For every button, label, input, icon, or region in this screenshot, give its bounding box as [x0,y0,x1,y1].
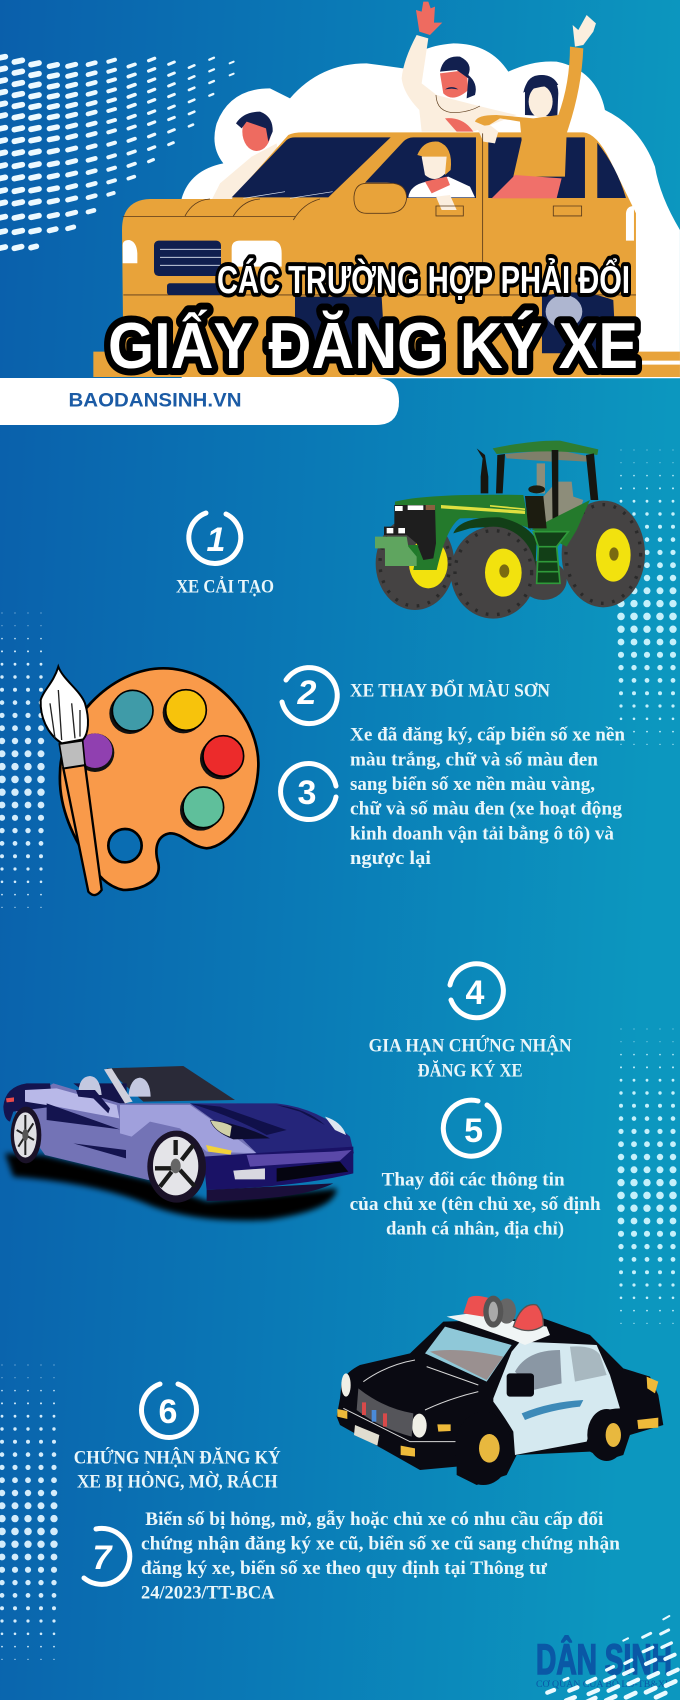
dot pattern: right lower [621,1029,674,1323]
item 6 label: CHỨNG NHẬN ĐĂNG KÝ [74,1446,281,1468]
salmon hand [445,118,473,132]
driver [408,141,475,210]
item 3 text [350,726,626,869]
icon: police car [337,1296,663,1485]
item 6 number: 6 [159,1393,177,1431]
item 5 text: danh cá nhân, địa chỉ) [386,1219,564,1239]
icon: blue convertible [3,1066,354,1221]
title line 2: GIẤY ĐĂNG KÝ XE [108,309,638,382]
item 1 number [189,513,241,563]
item 4 number: 4 [466,974,485,1012]
dot pattern: left lower [2,1365,55,1659]
item 4 number [450,964,503,1018]
item 2 number [282,668,337,724]
cloud [182,43,680,378]
headlights [123,206,634,267]
woman in cream [402,2,517,132]
item 7 text: 24/2023/TT-BCA [141,1583,275,1603]
ground band [93,352,680,377]
dot pattern: right upper [621,450,674,744]
item 4 label [369,1035,572,1082]
mirror [354,183,407,213]
logo: Dân Sinh: CƠ QUAN CỦA BỘ LĐ-TB&XH [536,1679,673,1689]
item 5 text: Thay đổi các thông tin [382,1170,565,1190]
car body [122,132,636,353]
site banner: BAODANSINH.VN [68,390,242,412]
item 3 text: ngược lại [350,849,431,869]
item 7 number [84,1528,130,1584]
dot pattern: left upper [0,613,42,907]
item 3 text: chữ và số màu đen (xe hoạt động [350,800,623,820]
item 5 text [350,1170,601,1239]
item 1 label: XE CẢI TẠO [176,577,274,598]
item 3 text: sang biển số xe nền màu vàng, [350,775,595,795]
item 2 number: 2 [297,674,317,712]
item 7 number: 7 [93,1539,114,1577]
item 5 number: 5 [464,1112,483,1150]
icon: paint palette [41,667,258,895]
item 7 text [141,1510,621,1603]
item 3 text: Xe đã đăng ký, cấp biển số xe nền [350,726,626,746]
item 1 number: 1 [207,521,225,559]
windows [232,137,391,197]
item 3 number [281,764,336,820]
header illustration: car with passengers [93,2,680,378]
item 5 number [443,1100,499,1156]
gold woman [475,15,596,198]
item 4 label: GIA HẠN CHỨNG NHẬN [369,1035,572,1057]
grille [154,241,221,276]
item 3 text: kinh doanh vận tải bằng ô tô) và [350,824,614,844]
item 4 label: ĐĂNG KÝ XE [418,1060,523,1082]
wave halftone: top left [0,57,234,249]
item 2 label: XE THAY ĐỔI MÀU SƠN [350,680,551,702]
item 6 label: XE BỊ HỎNG, MỜ, RÁCH [77,1471,278,1493]
wave halftone: bottom right [547,1616,678,1700]
wheels [295,292,616,353]
site banner [0,378,399,425]
item 5 text: của chủ xe (tên chủ xe, số định [350,1195,601,1215]
item 6 number [141,1384,197,1437]
icon: tractor [375,441,645,619]
item 7 text: đăng ký xe, biển số xe theo quy định tại Thông tư [141,1559,548,1579]
item 3 text: màu trắng, chữ và số màu đen [350,750,599,770]
item 7 text: Biển số bị hỏng, mờ, gẫy hoặc chủ xe có nhu cầu cấp đổi [145,1510,603,1530]
item 7 text: chứng nhận đăng ký xe cũ, biển số xe cũ sang chứng nhận [141,1534,621,1554]
body lines [123,133,636,295]
left man [212,112,280,200]
item 3 number: 3 [298,774,316,812]
item 6 label [74,1446,281,1493]
